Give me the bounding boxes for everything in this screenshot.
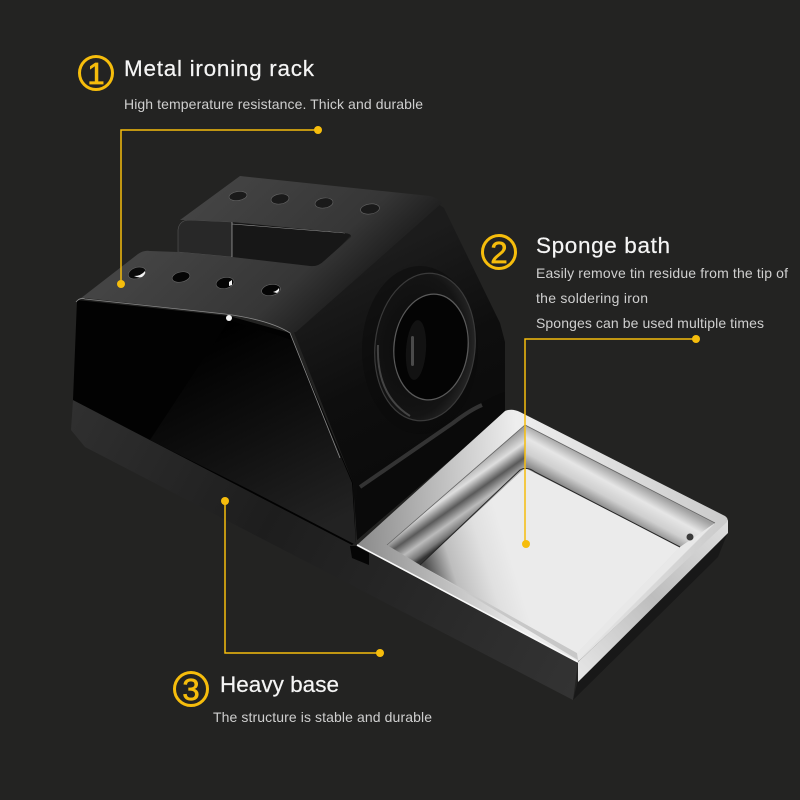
base plate <box>71 400 728 700</box>
callout 3: heavy base <box>174 497 432 725</box>
tray side face <box>578 520 728 682</box>
number 1 badge: 1 <box>87 56 105 91</box>
rear wall seen through slot <box>178 220 352 268</box>
heading 2: Sponge bath <box>536 233 670 258</box>
hole highlights <box>134 271 279 293</box>
description 2: Easily remove tin residue from the tip of <box>536 265 788 281</box>
leader line 1 <box>117 126 322 288</box>
product: soldering iron stand <box>71 176 728 700</box>
iron holder ring <box>362 266 482 434</box>
front opening <box>73 300 356 545</box>
tray rim <box>357 410 728 661</box>
number 2 badge <box>482 235 516 270</box>
callout 2: sponge bath: the soldering iron <box>536 290 648 306</box>
floor edge lines <box>420 468 680 565</box>
number 2 badge: 2 <box>490 235 508 270</box>
tray floor <box>420 468 680 653</box>
leader line 2 <box>522 335 700 548</box>
sponge tray <box>357 410 728 682</box>
leader line 3 <box>221 497 384 657</box>
description 1: High temperature resistance. Thick and durable <box>124 96 423 112</box>
number 1 badge <box>80 56 112 91</box>
opening edge highlight <box>76 298 340 458</box>
callout 1: metal ironing rack <box>80 56 423 288</box>
corner dark spot <box>686 534 694 540</box>
lower shelf <box>357 392 505 540</box>
heading 1: Metal ironing rack <box>124 56 315 81</box>
body side panel <box>293 203 505 540</box>
callout 2: sponge bath: Sponges can be used multiple times <box>536 315 764 331</box>
number 3 badge: 3 <box>182 672 200 707</box>
tray inner walls <box>387 425 525 565</box>
description 3: The structure is stable and durable <box>213 709 432 725</box>
slot at tray corner <box>350 546 369 565</box>
number 3 badge <box>174 672 208 707</box>
rack holes <box>127 190 380 297</box>
top plate of rack <box>76 176 442 333</box>
heading 3: Heavy base <box>220 672 339 697</box>
callout 2: sponge bath <box>482 233 788 548</box>
